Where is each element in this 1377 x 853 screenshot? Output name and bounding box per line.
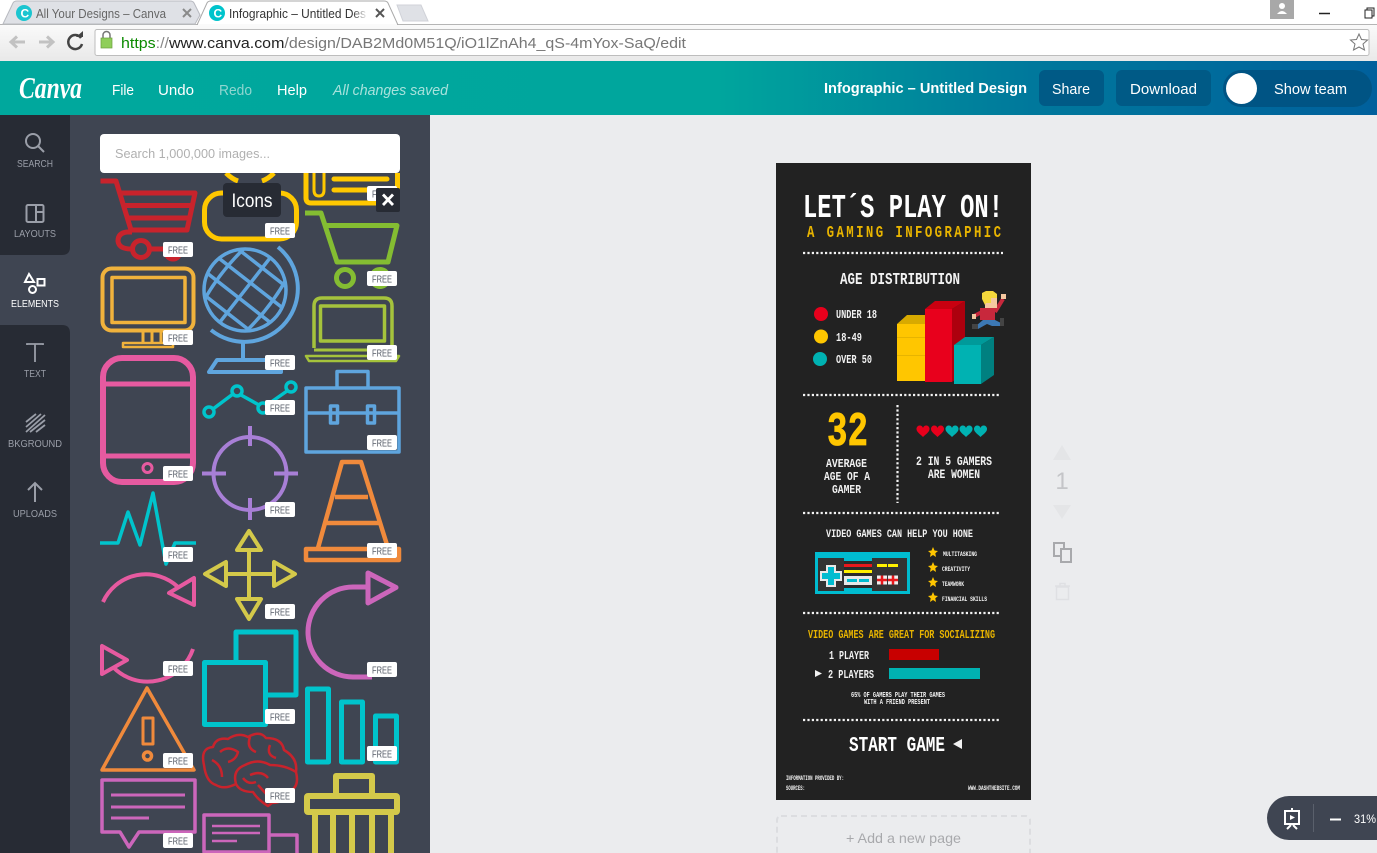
icon: yellow bag [204,173,296,239]
section: skills [815,529,987,603]
design title: Infographic – Untitled Design [824,81,1027,97]
section: socializing: VIDEO GAMES ARE GREAT FOR SOCIALIZING [808,629,995,642]
note [851,692,945,707]
reload icon [68,31,83,49]
nav: layouts [14,205,56,240]
search box: Search 1,000,000 images... [115,146,270,161]
stat: average age: AVERAGE [826,457,867,471]
zoom control: 31% [1354,814,1376,826]
lock icon [101,32,112,48]
nav: search: SEARCH [17,158,53,170]
FREE tags: FREE [372,438,392,450]
FREE tags: FREE [168,664,188,676]
inactive tab: C [20,6,30,20]
FREE tags: FREE [270,226,290,238]
nav: search [17,134,53,170]
legend: 18-49 [836,331,862,345]
infographic poster [776,163,1031,800]
stat: average age: GAMER [832,483,862,497]
nav: elements: ELEMENTS [11,298,59,310]
left panel background [0,115,430,853]
skill list: FINANCIAL SKILLS [942,596,987,603]
browser toolbar [0,25,1377,61]
delete page icon [1055,584,1070,600]
new tab button [397,5,428,21]
FREE tags: FREE [270,402,290,414]
FREE tags [163,186,397,848]
icon: u-turn arrow [308,573,396,677]
Canva logo: Canva [19,70,82,105]
hearts [916,425,987,437]
FREE tags: FREE [270,504,290,516]
pixel runner character [972,291,1006,329]
icon grid [100,173,399,853]
legend: UNDER 18 [836,308,877,322]
title: LET´S PLAY ON! [803,190,1003,227]
icon: pulse line [100,493,196,564]
inactive tab: All Your Designs – Canva [36,6,167,21]
bar: 1 player: 1 PLAYER [829,650,869,663]
FREE tags: FREE [168,836,188,848]
nav: background: BKGROUND [8,438,62,450]
FREE tags: FREE [372,748,392,760]
search box [100,134,400,173]
FREE tags: FREE [372,348,392,360]
panel edge cover over icons [70,115,430,173]
icon: red cart [100,181,195,259]
icon: curved arrow top [103,574,194,605]
share button: Share [1052,82,1090,98]
add page button: + Add a new page [846,830,961,846]
browser tab strip [0,0,1377,26]
FREE tags: FREE [372,664,392,676]
icon: line chart [204,382,296,417]
active tab: Infographic – Untitled Des [229,6,366,21]
page down arrow [1053,505,1071,519]
section: skills: VIDEO GAMES CAN HELP YOU HONE [826,529,973,541]
subtitle: A GAMING INFOGRAPHIC [807,225,1001,243]
share button [1039,70,1104,106]
icon: crosshair [202,426,298,520]
game controller [815,552,910,594]
active tab: C [214,6,222,20]
header menu: Help [277,82,307,99]
bookmark star [1350,34,1368,50]
3D bar chart [897,301,994,384]
sidebar navigation [0,115,70,853]
icon: laptop [306,298,399,361]
tooltip: Icons [223,183,281,217]
header menu: Redo [219,82,252,99]
legend: OVER 50 [836,353,872,367]
stat: gamers who are women: 2 IN 5 GAMERS [916,455,992,469]
icon: monitor [102,268,194,347]
bar: 2 players [815,668,980,682]
section: socializing [808,629,995,707]
nav: layouts: LAYOUTS [14,228,56,240]
header menu: File [112,82,134,99]
header menu: All changes saved [332,82,449,99]
FREE tags: FREE [168,756,188,768]
icon: warning triangle [102,688,194,770]
FREE tags: FREE [270,606,290,618]
stat: gamers who are women [916,425,992,482]
icon: yellow card [306,173,398,203]
FREE tags: FREE [372,274,392,286]
stat: average age [824,406,871,497]
footer credits [786,775,1020,792]
icon: bar columns [308,689,396,762]
FREE tags: FREE [168,550,188,562]
active tab [197,1,398,26]
legend [813,307,877,367]
copy page icon [1054,543,1071,562]
note: 65% OF GAMERS PLAY THEIR GAMES [851,692,945,700]
nav: uploads: UPLOADS [13,508,57,520]
present icon [1285,808,1299,829]
nav: text [24,344,46,380]
nav: uploads [13,483,57,520]
FREE tags: FREE [372,546,392,558]
FREE tags: FREE [168,244,188,256]
FREE tags: FREE [372,188,392,200]
forward arrow [39,36,53,48]
nav: background [8,414,62,450]
stat: gamers who are women: ARE WOMEN [928,468,980,482]
start game: START GAME [849,735,945,758]
heading: AGE DISTRIBUTION [840,270,960,289]
icon: green cart [305,213,397,286]
icon: speech bubble [102,780,195,847]
skill list: CREATIVITY [942,566,970,573]
footer credits: WWW.DASHTHEBSITE.COM [968,785,1020,792]
FREE tags: FREE [270,358,290,370]
profile avatar [1270,0,1294,19]
download button: Download [1130,82,1197,98]
skill list [928,547,987,603]
icon: four-way arrows [205,531,295,619]
FREE tags: FREE [168,468,188,480]
add page button [777,816,1030,853]
skill list: TEAMWORK [942,581,964,588]
section: age distribution [813,270,1006,384]
page number: 1 [1055,468,1069,495]
bar: 2 players: 2 PLAYERS [828,669,874,682]
icon: briefcase [306,372,399,452]
page controls [1053,445,1071,600]
icon: overlapping squares [204,632,296,724]
page up arrow [1053,445,1071,460]
icon: brain [203,734,297,806]
icon: curved arrow bottom [102,646,193,682]
icon: globe [202,246,300,374]
icon: trash can [307,776,397,853]
icon: tablet [103,358,193,482]
FREE tags: FREE [168,332,188,344]
bar: 1 player [829,649,939,663]
inactive tab [3,1,200,24]
icon: traffic cone [306,462,399,560]
show team toggle: Show team [1274,82,1347,98]
tooltip: Icons: Icons [232,191,272,212]
FREE tags: FREE [270,712,290,724]
nav: text: TEXT [24,368,46,380]
zoom control [1267,796,1377,840]
download button [1116,70,1211,106]
header menu: Undo [158,82,194,99]
footer credits: SOURCES: [786,785,805,792]
close button [376,188,400,212]
stat: average age: 32 [827,406,868,460]
nav: elements [11,274,59,310]
URL: https://www.canva.com /design/DAB2Md0M51Q/iO1lZnAh4_qS-4mYox-SaQ/edit [121,35,687,52]
icon: double speech bubble [204,815,297,853]
FREE tags: FREE [270,790,290,802]
Canva header bar [0,61,1377,115]
back arrow [11,36,25,48]
stat: average age: AGE OF A [824,470,871,484]
address bar [95,30,1369,56]
skill list: MULTITASKING [943,551,977,558]
window controls [1319,8,1374,18]
show team toggle [1223,70,1372,107]
note: WITH A FRIEND PRESENT [864,699,930,707]
footer credits: INFORMATION PROVIDED BY: [786,775,844,782]
header menu [112,82,449,99]
